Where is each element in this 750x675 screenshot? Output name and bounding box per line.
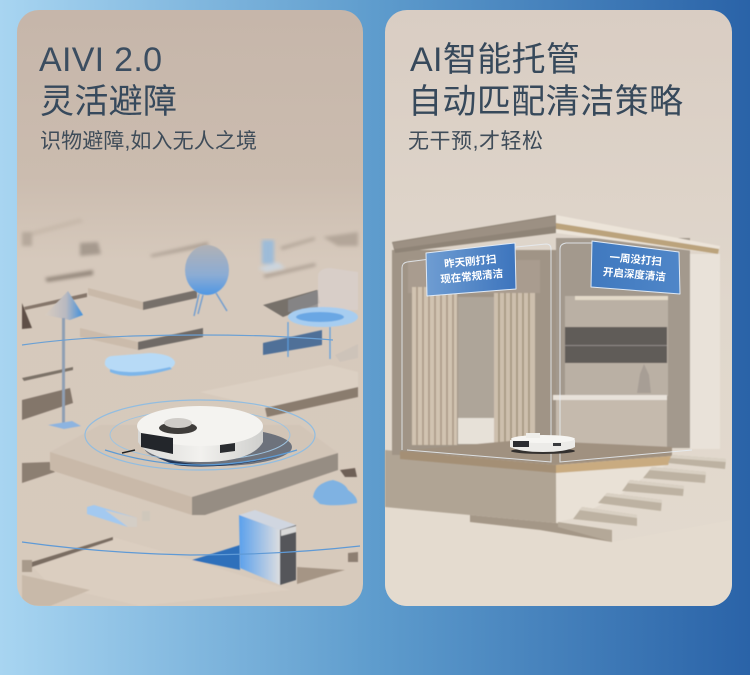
callout: not cleaned for a week [591,241,680,294]
counter [553,395,667,400]
right curtain [494,293,535,443]
subheading: 识物避障,如入无人之境 [40,130,257,153]
robot vacuum in room [510,433,575,454]
shelves [565,327,667,363]
scene: floor blocks [22,288,358,606]
icon: distant object [258,240,285,272]
heading: agile avoidance: 灵活避障 [40,83,177,121]
glass room outlines [402,243,692,462]
icon: table lamp [45,291,83,429]
left curtain [412,287,457,445]
glass side room at right [690,254,720,449]
left structural wall [392,250,556,455]
house base wall [385,450,556,523]
raised platform [50,425,338,515]
callout: cleaned yesterday: 昨天刚打扫 [444,253,497,271]
callout: cleaned yesterday [426,243,516,296]
heading: AI smart management: AI智能托管 [410,41,580,79]
cream cut wall under floor [556,456,672,522]
robot front sensor window [141,433,173,454]
heading: AIVI 2.0: AIVI 2.0 [39,41,162,79]
roof [392,215,720,254]
scene: far blurred floor tiles [22,218,358,282]
callout: not cleaned for a week: 开启深度清洁 [602,265,667,284]
icon: power tower on floor [239,510,296,585]
ground plane [385,584,732,606]
robot turret [159,418,197,434]
panel: AI smart cleaning [385,10,732,606]
panel: AIVI obstacle avoidance [17,10,363,606]
vase [637,364,651,393]
subheading: 无干预,才轻松 [408,130,543,153]
icon: glowing flat pad [105,353,175,376]
icon: round speaker on stand [185,245,229,316]
callout: cleaned yesterday: 现在常规清洁 [440,267,504,286]
window panel and curtains [408,260,540,445]
icon: glass chair [288,268,358,362]
robot vacuum with radar rings [85,400,315,470]
obstacle scan line upper [22,335,333,345]
callout: not cleaned for a week: 一周没打扫 [609,251,662,268]
heading: auto match cleaning strategy: 自动匹配清洁策略 [408,83,683,121]
house cutaway [385,215,726,542]
stairs [558,455,726,542]
icon: cable and stick on floor [87,505,150,527]
floor [400,440,672,465]
right room interior [553,238,690,448]
obstacle scan line lower [22,542,360,555]
icon: blue fluffy pile [313,480,357,505]
